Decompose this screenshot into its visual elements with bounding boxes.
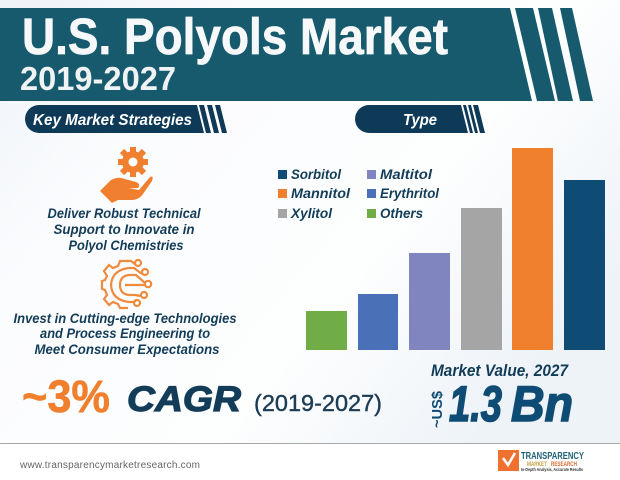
market value heading: Market Value, 2027	[431, 361, 569, 380]
market value number: 1.3	[449, 376, 502, 432]
website url: www.transparencymarketresearch.com	[19, 460, 200, 471]
title banner	[0, 8, 593, 101]
cagr period: (2019-2027)	[254, 390, 382, 416]
legend: Sorbitol	[291, 166, 342, 182]
icon: gear and hand	[100, 147, 153, 203]
heading: type: Type	[403, 112, 437, 129]
text: technical support strategy: Support to Innovate in	[54, 221, 195, 237]
icon: technology gear circuit	[102, 260, 151, 308]
market value unit: ~US$	[429, 390, 446, 428]
logo: RESEARCH	[551, 461, 577, 468]
text: technical support strategy: Deliver Robust Technical	[48, 205, 202, 221]
legend: Mannitol	[291, 185, 351, 201]
market value suffix: Bn	[511, 376, 573, 432]
legend: Maltitol	[380, 166, 433, 182]
text: technologies strategy: Meet Consumer Expectations	[34, 341, 220, 357]
text: technologies strategy: Invest in Cutting-edge Technologies	[14, 310, 237, 326]
text: technical support strategy: Polyol Chemistries	[68, 237, 184, 253]
text: technologies strategy: and Process Engineering to	[40, 325, 210, 341]
legend: Erythritol	[380, 185, 440, 201]
logo: MARKET	[527, 461, 547, 468]
heading: type	[355, 105, 485, 133]
footer divider	[0, 443, 620, 444]
cagr value: ~3%	[22, 371, 110, 422]
logo: TRANSPARENCY	[521, 451, 584, 462]
legend: Others	[380, 205, 423, 221]
subtitle years: 2019-2027	[20, 60, 176, 97]
heading: key market strategies: Key Market Strategies	[33, 112, 192, 129]
logo: In-Depth Analysis, Accurate Results	[521, 467, 583, 472]
legend: Xylitol	[290, 205, 333, 221]
title: U.S. Polyols Market	[22, 8, 448, 65]
heading: key market strategies	[25, 105, 227, 133]
cagr label: CAGR	[127, 380, 242, 419]
legend	[278, 166, 440, 221]
bar chart	[306, 148, 605, 350]
logo	[498, 450, 584, 472]
